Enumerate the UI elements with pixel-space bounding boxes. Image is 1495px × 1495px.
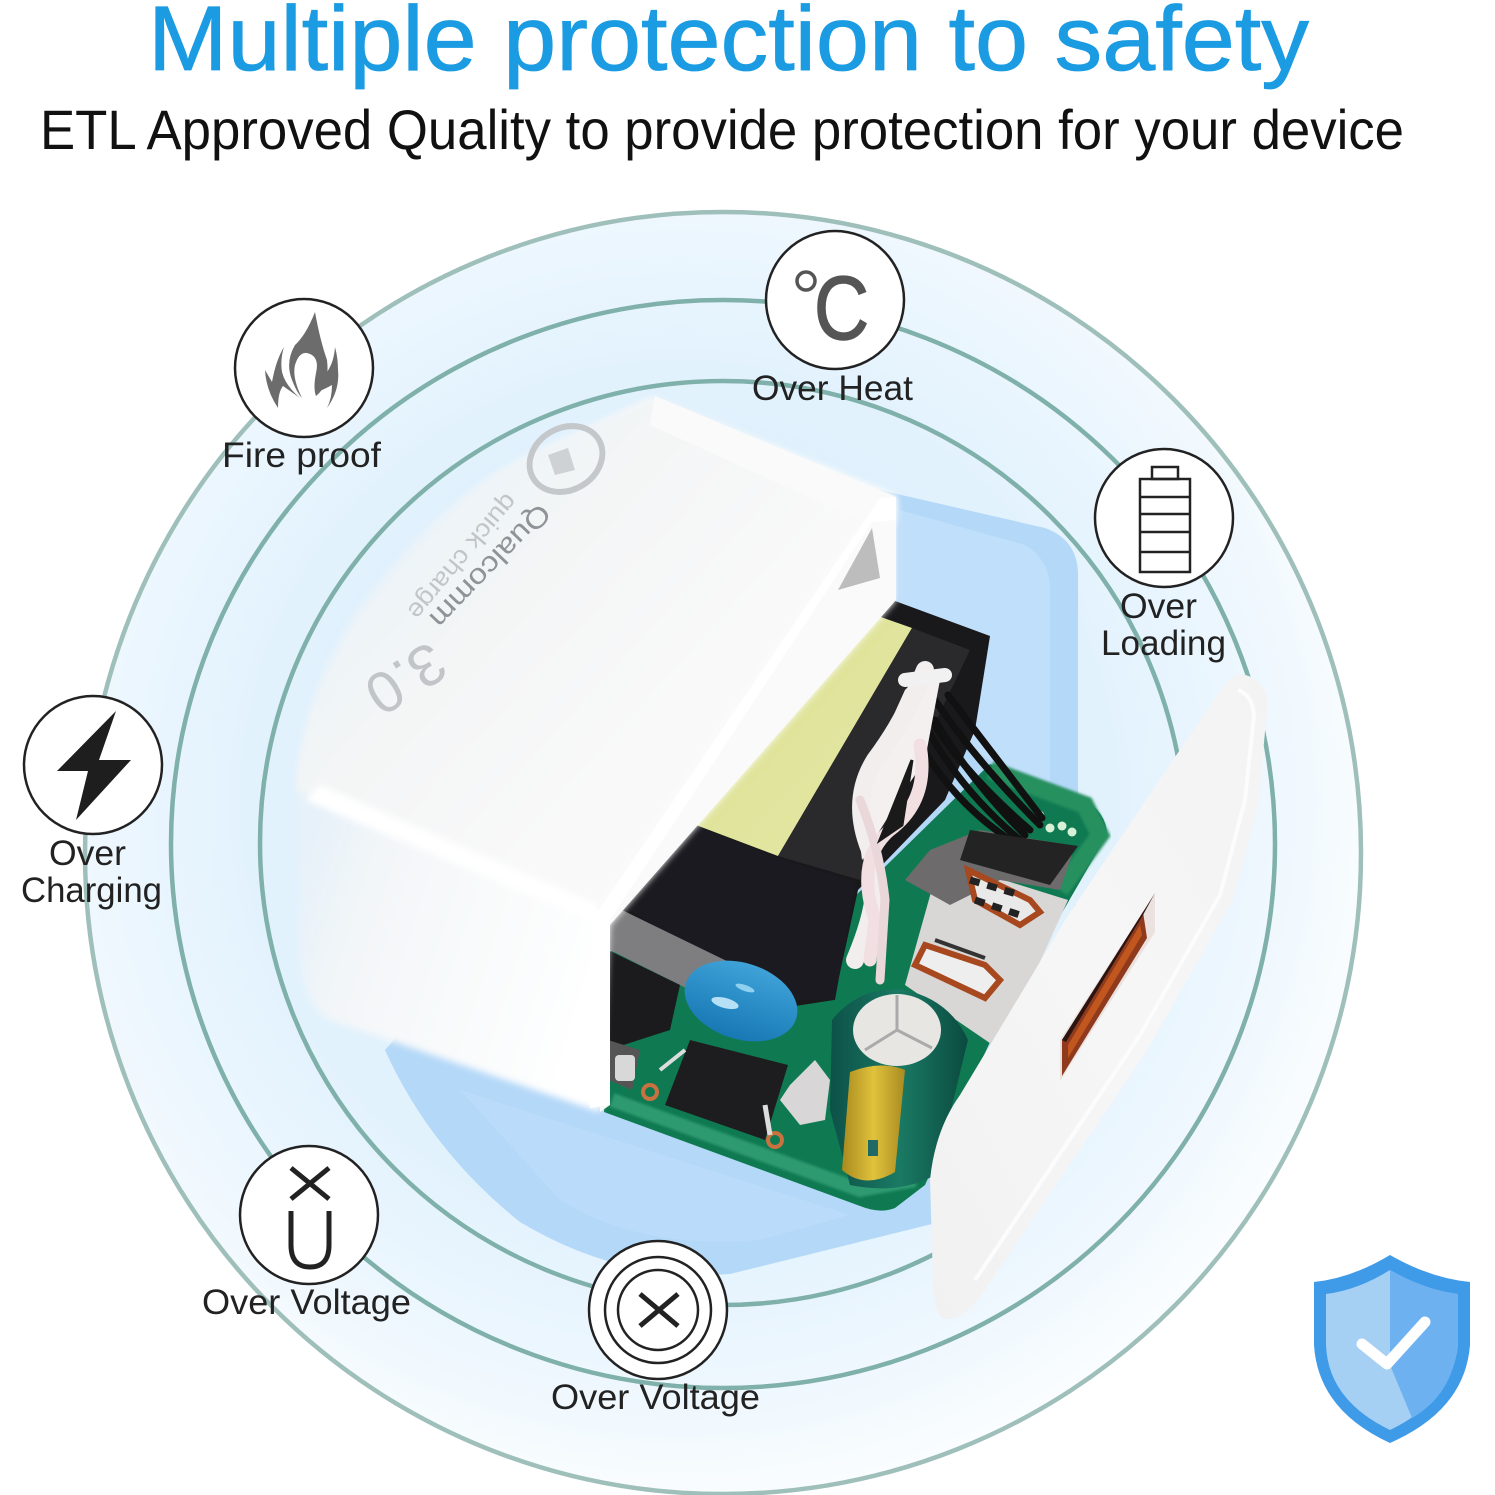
electrolytic capacitor [830,989,968,1188]
label: over charging [21,834,162,910]
label: over voltage bottom: Over Voltage [551,1378,760,1417]
front plate [930,674,1268,1319]
background disc with concentric rings [85,212,1361,1494]
black wires [915,695,1078,885]
label: over charging: Over [49,834,126,873]
icon: over heat [766,231,904,369]
logo on shell: quick charge [402,488,523,625]
label: over loading [1101,587,1226,663]
circuit board [604,764,1107,1211]
label: over loading: Over [1120,587,1197,626]
label: over charging: Charging [21,871,162,910]
USB slot [1060,893,1155,1081]
icon: over loading battery [1095,449,1233,587]
label: fire proof: Fire proof [222,436,381,475]
chip [643,1040,830,1147]
icon: over charging bolt [24,696,162,834]
logo on shell [354,413,614,728]
USB port [905,830,1090,1050]
icon: over voltage target [589,1241,727,1379]
icon: shield [1314,1255,1470,1443]
blue capacitor [674,947,808,1055]
transformer core [612,577,990,1010]
white and pink wires [855,670,945,980]
logo on shell: 3.0 [354,629,458,728]
label: over loading: Loading [1101,624,1226,663]
logo on shell: Qualcomm [424,498,557,634]
blue panel behind charger [385,490,1078,1275]
charger body shell [296,396,896,1112]
subtitle: ETL Approved Quality to provide protection for your device [40,98,1404,161]
charger [296,396,1268,1319]
grey bracket and socket [608,910,735,1090]
icon: over heat: C [814,259,869,359]
label: over voltage left: Over Voltage [202,1283,411,1322]
icon: fire proof [235,299,373,437]
icon: over voltage U [240,1146,378,1284]
label: over heat: Over Heat [752,369,913,408]
